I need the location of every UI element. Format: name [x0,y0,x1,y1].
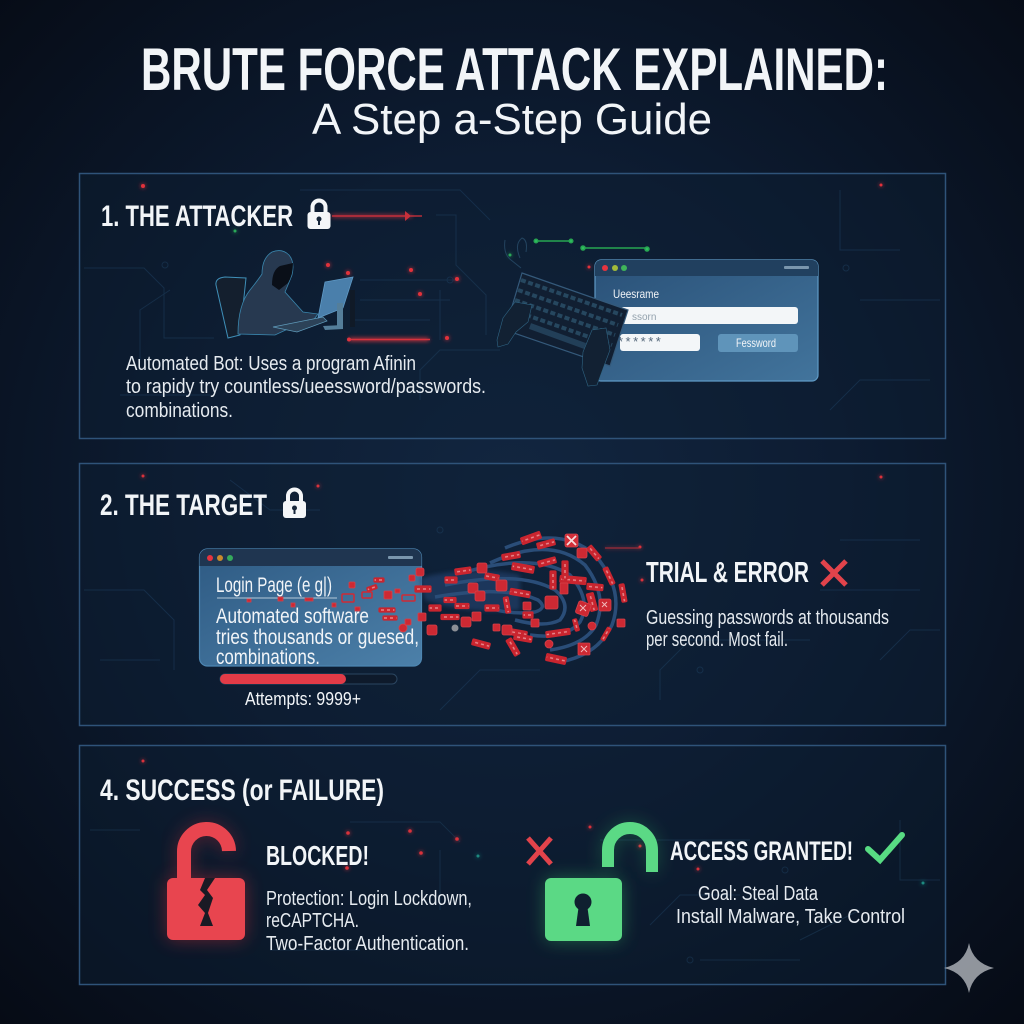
network nodes [141,184,882,340]
description text: automated bot: Automated Bot: Uses a program Afinin [126,353,416,375]
trial and error description: per second. Most fail. [646,629,788,651]
green circuit traces [534,239,649,251]
username label: Ueesrame [613,287,659,301]
trial and error description [646,607,889,651]
login window [595,260,818,381]
blocked description: reCAPTCHA. [266,910,359,932]
blocked description: Protection: Login Lockdown, [266,888,472,910]
network nodes [142,760,924,884]
X marks on particles [567,536,607,652]
panel: success or failure [80,746,946,984]
login page description [216,605,419,669]
icon: padlock [283,490,306,518]
access granted description [676,883,905,928]
icon: open green padlock [545,828,652,941]
login page description: tries thousands or guesed, [216,626,419,649]
login page description: combinations. [216,646,320,669]
password button: Fessword [736,336,776,350]
access granted description: Install Malware, Take Control [676,906,905,928]
icon: green check [868,835,902,860]
section heading: the attacker: 1. THE ATTACKER [101,200,293,233]
access granted heading: ACCESS GRANTED! [670,836,853,866]
username field [620,307,798,324]
illustration: fingerprint swirl [420,538,616,662]
password field: ****** [618,334,663,349]
access granted description: Goal: Steal Data [698,883,819,905]
outlined particles near window [342,592,415,602]
subtitle: A Step a-Step Guide [312,95,712,144]
password guess particles [367,531,627,665]
panel: the target [80,464,946,726]
attempts progress bar [220,674,397,684]
attempts label: Attempts: 9999+ [245,689,361,709]
red square particles [247,534,625,655]
section heading: success or failure: 4. SUCCESS (or FAILURE) [100,774,384,807]
trial and error heading: TRIAL & ERROR [646,557,809,589]
icon: red x [822,561,846,585]
blocked description: Two-Factor Authentication. [266,933,469,955]
password field [618,334,700,351]
illustration: hooded attacker at computer [216,251,355,338]
section heading: the target: 2. THE TARGET [100,489,267,522]
arrow: incoming red signal [347,338,430,342]
trial and error description: Guessing passwords at thousands [646,607,889,629]
panel: the attacker [80,174,946,438]
icon: broken red padlock [167,829,245,940]
icon: padlock [308,201,330,229]
description text: automated bot [126,353,486,422]
grey particle [452,624,458,632]
password button [718,334,798,352]
icon: sparkle watermark [944,943,994,993]
login page description: Automated software [216,605,369,628]
arrow: outgoing red signal [332,211,422,221]
icon: red x [528,838,551,864]
login page window [200,549,422,669]
description text: automated bot: combinations. [126,400,233,422]
description text: automated bot: to rapidy try countless/ueessword/passwords. [126,376,486,398]
username field: ssorn [632,312,656,323]
illustration: keyboard with hands [497,238,628,386]
blocked heading: BLOCKED! [266,840,369,871]
network nodes [142,474,882,582]
blocked description [266,888,472,955]
login page label: Login Page (e g|) [216,574,332,597]
